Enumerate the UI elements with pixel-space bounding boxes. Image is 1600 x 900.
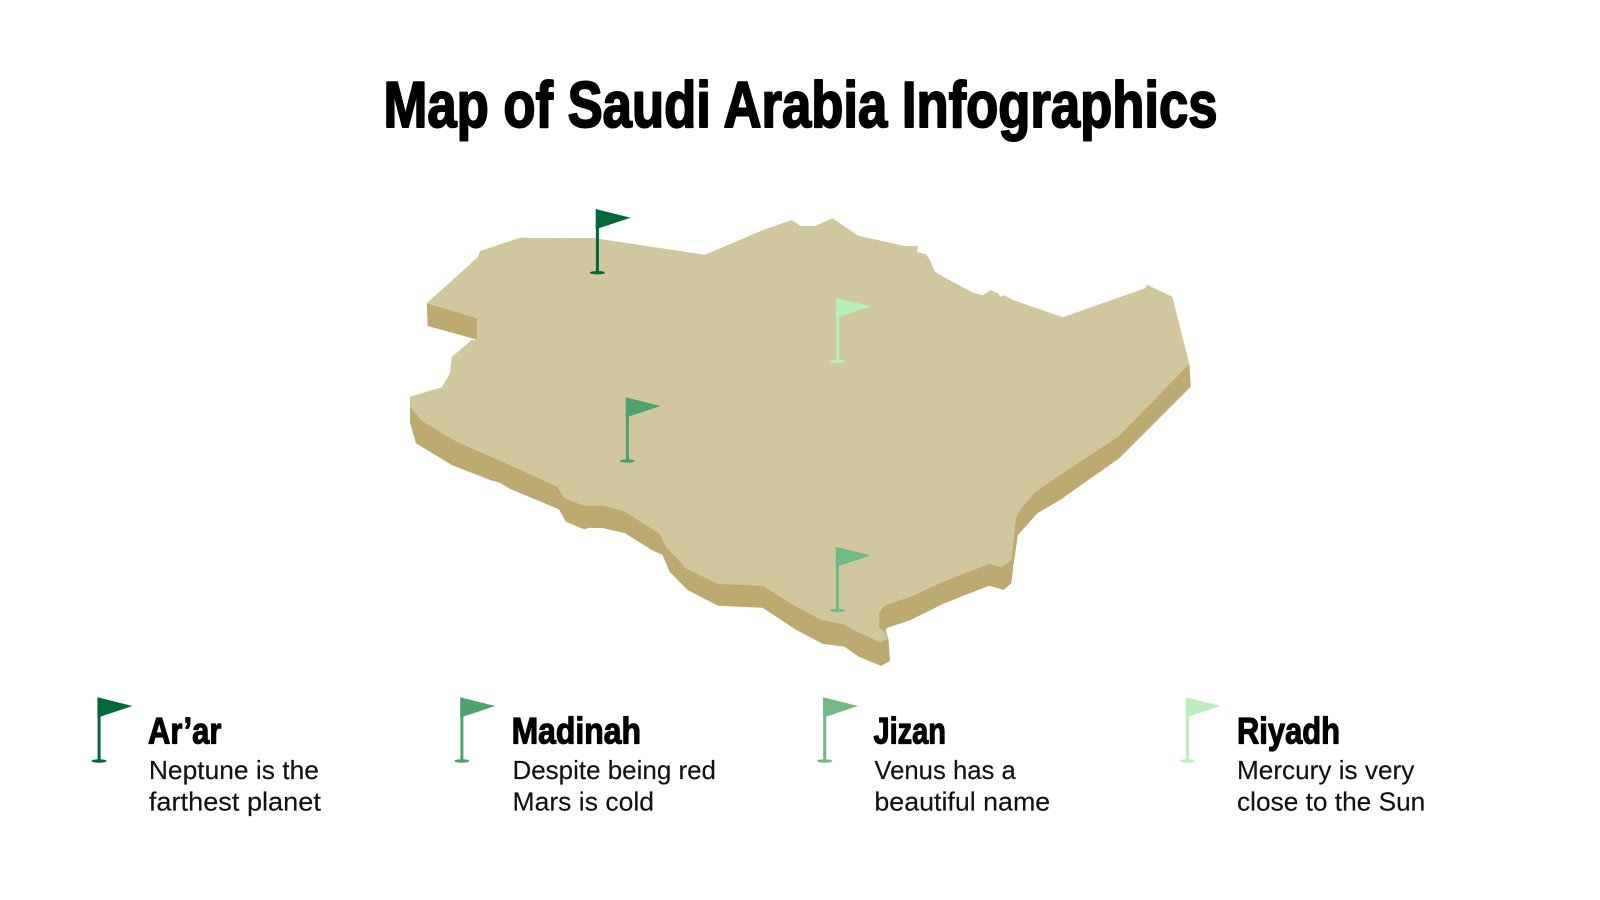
text: Mars description: Mars is cold bbox=[512, 787, 654, 817]
map flag: Ar'ar bbox=[590, 209, 631, 274]
icon: dark green flag bbox=[92, 697, 132, 763]
map: extruded side bbox=[410, 364, 1191, 666]
text: Mercury description bbox=[1237, 755, 1425, 817]
text: Venus description bbox=[874, 755, 1050, 817]
map flag: Jizan bbox=[830, 547, 871, 612]
text: Mercury description: close to the Sun bbox=[1237, 787, 1425, 817]
text: Mars description bbox=[512, 755, 716, 817]
text: Venus description: Venus has a bbox=[874, 755, 1016, 785]
map flag: Riyadh bbox=[830, 298, 871, 363]
title: Map of Saudi Arabia Infographics bbox=[384, 68, 1218, 141]
map flag: Madinah bbox=[620, 397, 661, 463]
heading: Jizan: Jizan bbox=[874, 709, 946, 751]
heading: Ar'ar: Ar’ar bbox=[148, 709, 222, 751]
legend item: Madinah bbox=[454, 697, 716, 817]
legend item: Riyadh bbox=[1180, 697, 1425, 817]
legend item: Jizan bbox=[817, 697, 1050, 817]
heading: Madinah: Madinah bbox=[512, 709, 641, 751]
text: Neptune description bbox=[149, 755, 322, 817]
icon: medium green flag bbox=[454, 697, 495, 763]
map of Saudi Arabia bbox=[410, 218, 1191, 666]
text: Mars description: Despite being red bbox=[512, 755, 716, 785]
text: Venus description: beautiful name bbox=[874, 787, 1050, 817]
icon: light green flag bbox=[817, 697, 858, 763]
heading: Riyadh: Riyadh bbox=[1237, 709, 1340, 751]
text: Neptune description: farthest planet bbox=[149, 787, 322, 817]
legend item: Ar'ar bbox=[92, 697, 322, 817]
icon: pale green flag bbox=[1180, 697, 1221, 763]
text: Neptune description: Neptune is the bbox=[149, 755, 319, 785]
map: top surface bbox=[410, 218, 1189, 642]
text: Mercury description: Mercury is very bbox=[1237, 755, 1414, 785]
map: northern edge side bbox=[427, 303, 477, 340]
